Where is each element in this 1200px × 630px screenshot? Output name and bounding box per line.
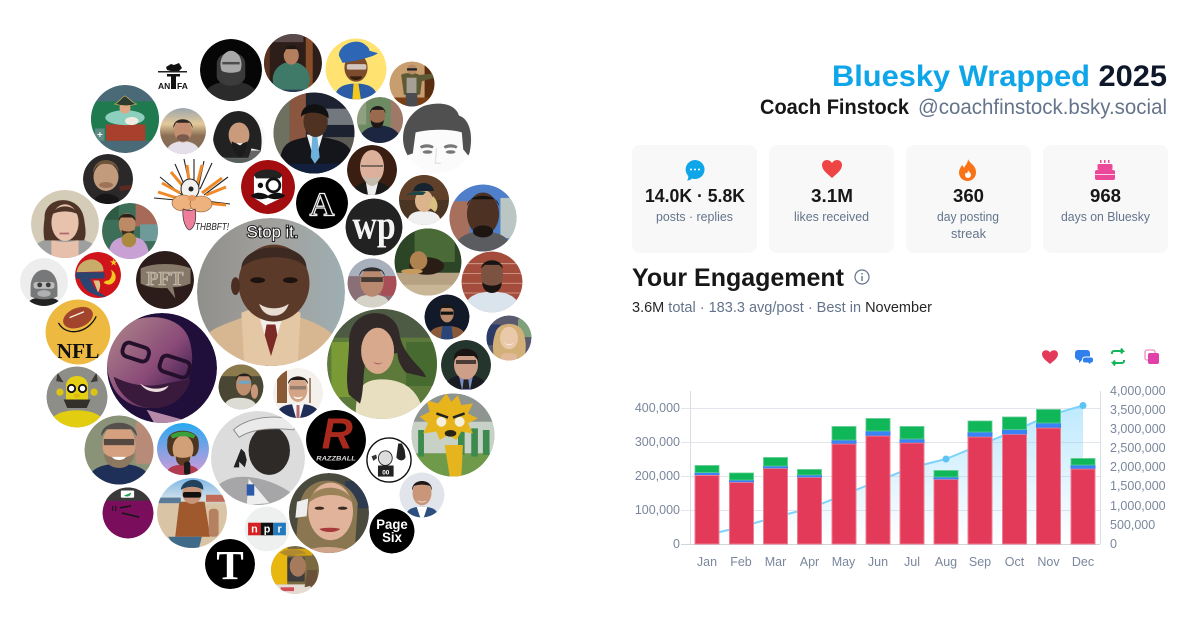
avatar: PFT silver letters logo bbox=[136, 251, 194, 309]
avatar: yellow cartoon with horns bbox=[46, 366, 108, 428]
panel: stat card posts and replies bbox=[632, 145, 757, 253]
avatar: napoleon cartoon at podium: + bbox=[97, 129, 103, 140]
x axis month labels: Nov bbox=[1037, 555, 1060, 569]
avatar: Page Six logo bbox=[370, 508, 414, 554]
avatar: napoleon cartoon at podium bbox=[91, 85, 159, 153]
heading: Your Engagement: Your Engagement bbox=[632, 264, 845, 292]
avatar: black and white football fan logo: 00 bbox=[382, 470, 390, 477]
avatar: dog on a ledge bbox=[394, 228, 462, 296]
data points on the cumulative line bbox=[942, 402, 1086, 462]
avatar: man with coconut in purple shirt bbox=[102, 203, 158, 259]
avatar: Razzball R logo: R bbox=[322, 410, 353, 458]
avatar: NPR logo: p bbox=[264, 524, 271, 536]
x axis month labels: Apr bbox=[800, 555, 819, 569]
avatar: Natty Boh mascot bbox=[241, 160, 295, 214]
avatar: smiling man in navy suit with cross bbox=[273, 368, 323, 418]
avatar: woman with short brown hair bbox=[31, 190, 99, 258]
avatar: Page Six logo: Six bbox=[382, 530, 402, 545]
legend: engagement chart icons bbox=[1042, 348, 1159, 366]
avatar: purple cartoon with leaf hat bbox=[102, 487, 154, 538]
grid lines and axes bbox=[681, 391, 1100, 544]
avatar: The Athletic A logo bbox=[296, 177, 348, 229]
text: streak value: 360 bbox=[953, 185, 984, 206]
icon: heart bbox=[822, 160, 842, 178]
text: likes label: likes received bbox=[794, 210, 869, 224]
text: display name: Coach Finstock bbox=[760, 96, 909, 119]
avatar: man in black suit and blue tie on set bbox=[274, 92, 355, 174]
text: streak label: streak bbox=[951, 227, 987, 241]
avatar: Bill the Cat thbbft: THBBFT! bbox=[195, 222, 229, 233]
avatar: blonde woman selfie bbox=[289, 473, 369, 553]
chart: monthly engagement stacked bars with cumulative line bbox=[635, 384, 1166, 569]
x axis month labels: Feb bbox=[730, 555, 752, 569]
avatar: The Athletic A logo: A bbox=[310, 185, 335, 223]
avatar: man with green cap on blue purple gradient bbox=[157, 423, 209, 475]
avatar: man with glasses in sweater bbox=[348, 258, 396, 308]
avatar: woman with long dark hair in cream top bbox=[327, 309, 437, 419]
icon: replies bubbles bbox=[1075, 350, 1094, 365]
icon: likes heart bbox=[1042, 350, 1058, 364]
avatar: man in blue suit on light background bbox=[400, 472, 444, 518]
y axis labels right: 2,000,000 bbox=[1110, 460, 1166, 474]
avatar: selfie man with scaffolding bbox=[450, 184, 516, 252]
avatar: football helmet with hammer and sickle bbox=[75, 252, 121, 298]
title: Bluesky Wrapped 2025: Bluesky Wrapped 2025 bbox=[832, 60, 1167, 93]
y axis labels right: 500,000 bbox=[1110, 518, 1155, 532]
icon: antifa logo: AN bbox=[158, 81, 170, 91]
avatar: sketched man with swept hair bbox=[403, 104, 471, 164]
text: days value: 968 bbox=[1090, 185, 1121, 206]
avatar: smiling bearded man with purple tint bbox=[107, 313, 217, 425]
y axis labels left: 200,000 bbox=[635, 469, 680, 483]
y axis labels left bbox=[635, 401, 680, 551]
panel: stat card days on Bluesky bbox=[1043, 145, 1168, 253]
text: likes value: 3.1M bbox=[811, 185, 853, 206]
text: posts and replies value: 14.0K · 5.8K bbox=[645, 185, 746, 206]
avatar: bearded man in black and white bbox=[200, 39, 262, 101]
text: posts and replies label: posts · replies bbox=[656, 210, 733, 224]
icon: chat bubble bbox=[686, 160, 705, 180]
avatar: grey helmet man bbox=[20, 258, 68, 306]
y axis labels right: 3,000,000 bbox=[1110, 422, 1166, 436]
avatar: heavy man with glasses and tie bbox=[441, 340, 491, 390]
avatar: Razzball R logo: RAZZBALL bbox=[316, 455, 356, 462]
text: handle: @coachfinstock.bsky.social bbox=[918, 96, 1167, 119]
bars: replies blue bbox=[694, 423, 1096, 482]
y axis labels right: 4,000,000 bbox=[1110, 384, 1166, 398]
y axis labels left: 400,000 bbox=[635, 401, 680, 415]
icon: info bbox=[855, 270, 869, 284]
y axis labels left: 0 bbox=[673, 537, 680, 551]
icon: flame bbox=[959, 159, 976, 181]
avatar: blonde woman smiling bbox=[486, 316, 532, 360]
avatar: dark portrait man bbox=[83, 154, 133, 204]
avatar: woman in green sweater by bookcase bbox=[264, 34, 322, 97]
y axis labels left: 300,000 bbox=[635, 435, 680, 449]
x axis month labels: Oct bbox=[1005, 555, 1025, 569]
icon: antifa logo bbox=[158, 63, 188, 91]
avatar: NFL logo on gold bbox=[46, 300, 110, 364]
text: engagement summary: 3.6M total · 183.3 avg/post · Best in November bbox=[632, 300, 932, 316]
avatar: man in sunglasses and brown jacket bbox=[424, 294, 470, 340]
x axis month labels: Dec bbox=[1072, 555, 1094, 569]
avatar: man in olive jacket bbox=[390, 62, 434, 106]
avatar: large Michael Jordan Stop it meme: Stop it. bbox=[247, 223, 298, 241]
x axis month labels: Jun bbox=[868, 555, 888, 569]
icon: birthday cake bbox=[1095, 160, 1115, 180]
avatar: man in Seattle cap bbox=[399, 175, 449, 225]
panel: stat card likes bbox=[769, 145, 894, 253]
bars: likes red bbox=[695, 428, 1095, 544]
y axis labels right: 2,500,000 bbox=[1110, 441, 1166, 455]
avatar: man with sunset bbox=[160, 108, 206, 154]
y axis labels left: 100,000 bbox=[635, 503, 680, 517]
x axis month labels: Jul bbox=[904, 555, 920, 569]
avatar: PFT silver letters logo: PFT bbox=[146, 268, 184, 290]
avatar: smiling man in glasses and navy tee bbox=[84, 416, 154, 484]
avatar: large Michael Jordan Stop it meme bbox=[197, 218, 345, 369]
icon: reposts arrows bbox=[1112, 348, 1124, 366]
x axis month labels: May bbox=[832, 555, 856, 569]
avatar: man in white tee at brick wall bbox=[462, 252, 522, 312]
text: streak label: day posting bbox=[937, 210, 999, 224]
x axis month labels bbox=[697, 555, 1094, 569]
line: cumulative engagement bbox=[707, 406, 1083, 535]
bars: reposts green bbox=[695, 410, 1095, 480]
icon: quotes copies bbox=[1145, 350, 1159, 364]
avatar: black and white football fan logo bbox=[367, 438, 411, 482]
avatar: New York Times T logo: T bbox=[216, 542, 244, 588]
y axis labels right: 0 bbox=[1110, 537, 1117, 551]
avatar: sun mascot Kingsley bbox=[412, 394, 494, 476]
y axis labels right: 1,000,000 bbox=[1110, 499, 1166, 513]
avatar: woman on the beach in brown top bbox=[157, 478, 227, 548]
y axis labels right bbox=[1110, 384, 1166, 551]
avatar: Washington Post wp logo bbox=[346, 198, 402, 256]
avatar: man on phone bbox=[218, 364, 264, 410]
avatar: NPR logo: n bbox=[251, 524, 258, 536]
y axis labels right: 1,500,000 bbox=[1110, 479, 1166, 493]
avatar: Washington Post wp logo: wp bbox=[352, 201, 396, 247]
area: cumulative engagement fill bbox=[707, 406, 1083, 544]
y axis labels right: 3,500,000 bbox=[1110, 403, 1166, 417]
panel: stat card streak bbox=[906, 145, 1031, 253]
avatar: NFL logo on gold: NFL bbox=[57, 339, 99, 363]
text: days label: days on Bluesky bbox=[1061, 210, 1151, 224]
avatar: NPR logo bbox=[244, 506, 290, 552]
x axis month labels: Aug bbox=[935, 555, 957, 569]
avatar: Bill the Cat thbbft bbox=[154, 159, 230, 233]
avatar: Page Six logo: Page bbox=[376, 517, 408, 532]
avatar: cartoon man in blue cap on yellow bbox=[326, 38, 386, 100]
x axis month labels: Mar bbox=[765, 555, 786, 569]
panel: header title bbox=[760, 60, 1167, 119]
x axis month labels: Sep bbox=[969, 555, 991, 569]
avatar: man in navy shirt outdoors bbox=[357, 97, 403, 143]
avatar: man in yellow cab bbox=[271, 546, 319, 594]
avatar: New York Times T logo bbox=[205, 539, 255, 589]
icon: antifa logo: FA bbox=[177, 81, 188, 91]
panel: avatar bubble cluster bbox=[20, 34, 532, 594]
avatar: NPR logo: r bbox=[277, 524, 282, 536]
avatar: buffalo in western jacket bbox=[211, 411, 305, 505]
avatar: Razzball R logo bbox=[306, 410, 366, 470]
avatar: long haired bearded cartoon bbox=[213, 111, 265, 163]
x axis month labels: Jan bbox=[697, 555, 717, 569]
avatar: bald man with glasses bbox=[347, 145, 397, 195]
